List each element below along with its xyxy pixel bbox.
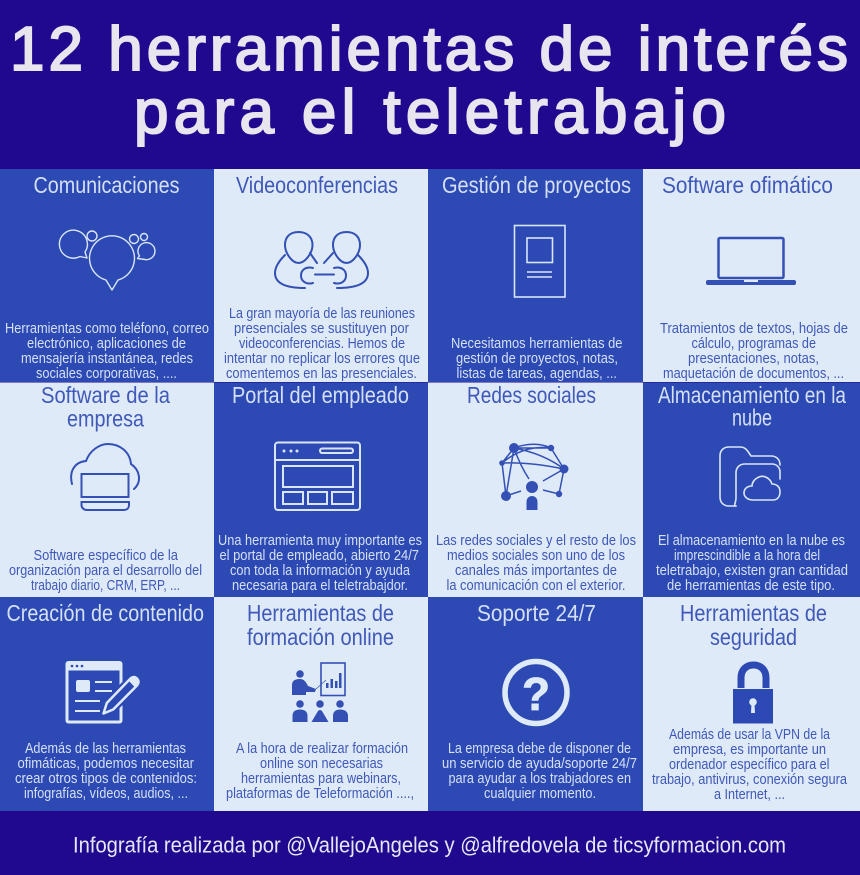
body text: Gestión de proyectos: Necesitamos herramientas de (451, 336, 622, 352)
body text: Herramientas de formación online: online son necesarias (260, 756, 383, 772)
panel: Videoconferencias (214, 169, 428, 382)
body text: Herramientas de formación online: A la hora de realizar formación (236, 741, 408, 757)
panel: Soporte 24/7 (428, 597, 643, 811)
body text: Almacenamiento en la nube (656, 533, 848, 594)
body text: Creación de contenido: ofimáticas, podemos necesitar (18, 756, 194, 772)
heading: Herramientas de seguridad (680, 600, 827, 650)
body text: Creación de contenido: crear otros tipos de contenidos: (15, 771, 197, 787)
body text: Portal del empleado: necesaria para el teletrabajdor. (232, 578, 408, 594)
panel: Creación de contenido (0, 597, 214, 811)
body text: Portal del empleado: con toda la información y ayuda (230, 563, 411, 579)
body text: Software ofimático: presentaciones, notas, (688, 351, 819, 367)
body text: Videoconferencias: presenciales se sustituyen por (234, 321, 409, 337)
body text: Herramientas de formación online (226, 741, 414, 802)
body text: Herramientas de seguridad: empresa, es importante un (673, 742, 826, 758)
body text: Software de la empresa: trabajo diario, CRM, ERP, ... (31, 578, 180, 594)
body text: Redes sociales: medios sociales son uno de los (447, 548, 625, 564)
heading: Herramientas de seguridad: Herramientas de (680, 600, 827, 626)
body text: Herramientas de seguridad: a Internet, ... (714, 787, 785, 803)
panel: Herramientas de seguridad (643, 597, 860, 811)
body text: Comunicaciones: Herramientas como teléfono, correo (5, 321, 209, 337)
title (10, 15, 848, 147)
body text: Videoconferencias: comentemos en las presenciales. (226, 366, 417, 382)
body text: Comunicaciones: mensajería instantánea, redes (21, 351, 193, 367)
body text: Herramientas de formación online: herramientas para webinars, (241, 771, 401, 787)
body text: Almacenamiento en la nube: de herramientas de este tipo. (667, 578, 835, 594)
body text: Gestión de proyectos (451, 336, 622, 382)
body text: Videoconferencias: videoconferencias. Hemos de (239, 336, 405, 352)
body text: Software de la empresa: Software específico de la (34, 548, 179, 564)
icon: cloud folder (720, 447, 780, 506)
body text: Software ofimático (660, 321, 848, 382)
heading: Software de la empresa: Software de la (41, 382, 170, 408)
body text: Herramientas de formación online: plataformas de Teleformación ...., (226, 786, 414, 802)
body text: Portal del empleado (218, 533, 422, 594)
icon: speech bubbles (59, 230, 155, 290)
footer credit: Infografía realizada por @VallejoAngeles y @alfredovela de ticsyformacion.com (73, 832, 786, 858)
body text: Soporte 24/7: para ayudar a los trabjadores en (448, 771, 631, 787)
heading: Creación de contenido: Creación de contenido (6, 600, 204, 626)
icon: two people connected (275, 232, 368, 288)
body text: Comunicaciones (5, 321, 209, 382)
body text: Software de la empresa: organización para el desarrollo del (9, 563, 202, 579)
body text: Videoconferencias: La gran mayoría de las reuniones (229, 306, 415, 322)
body text: Creación de contenido (15, 741, 197, 802)
title: 12 herramientas de interés (10, 15, 848, 84)
heading: Redes sociales: Redes sociales (467, 382, 596, 408)
body text: Software de la empresa (9, 548, 202, 594)
heading: Soporte 24/7: Soporte 24/7 (477, 600, 596, 626)
body text: Portal del empleado: el portal de empleado, abierto 24/7 (220, 548, 419, 564)
heading: Almacenamiento en la nube (658, 382, 846, 430)
body text: Redes sociales (436, 533, 636, 594)
body text: Creación de contenido: infografías, vídeos, audios, ... (24, 786, 188, 802)
heading: Gestión de proyectos: Gestión de proyectos (442, 172, 631, 198)
heading: Software de la empresa (41, 382, 170, 432)
icon: document (514, 226, 565, 297)
heading: Herramientas de formación online: Herramientas de (247, 600, 394, 626)
heading: Software de la empresa: empresa (67, 406, 144, 432)
icon: teacher and audience (292, 663, 348, 722)
panel: Gestión de proyectos (428, 169, 643, 382)
body text: Herramientas de seguridad: ordenador específico para el (669, 757, 830, 773)
body text: Software ofimático: cálculo, programas de (692, 336, 816, 352)
body text: Creación de contenido: Además de las herramientas (25, 741, 186, 757)
body text: Redes sociales: Las redes sociales y el resto de los (436, 533, 636, 549)
body text: Videoconferencias (224, 306, 420, 382)
body text: Redes sociales: la comunicación con el exterior. (446, 578, 626, 594)
body text: Portal del empleado: Una herramienta muy importante es (218, 533, 422, 549)
icon: content editor (66, 661, 138, 724)
body text: Gestión de proyectos: gestión de proyectos, notas, (456, 351, 618, 367)
heading: Herramientas de formación online: formación online (247, 624, 394, 650)
panel: Herramientas de formación online (214, 597, 428, 811)
icon: padlock (733, 665, 773, 724)
body text: Videoconferencias: intentar no replicar los errores que (224, 351, 420, 367)
body text: Soporte 24/7 (442, 741, 637, 802)
icon: cloud with laptop (71, 444, 139, 510)
title: para el teletrabajo (134, 78, 726, 147)
heading: Almacenamiento en la nube: nube (732, 404, 772, 430)
heading: Herramientas de seguridad: seguridad (710, 624, 797, 650)
body text: Redes sociales: canales más importantes de (455, 563, 617, 579)
panel: Redes sociales (428, 382, 643, 597)
icon: laptop (706, 238, 796, 285)
body text: Gestión de proyectos: listas de tareas, agendas, ... (456, 366, 617, 382)
icon: web portal window (275, 442, 360, 510)
panel: Comunicaciones (0, 169, 214, 382)
body text: Herramientas de seguridad: Además de usar la VPN de la (669, 727, 831, 743)
icon: social network (499, 443, 568, 510)
body text: Soporte 24/7: un servicio de ayuda/soporte 24/7 (442, 756, 637, 772)
body text: Soporte 24/7: cualquier momento. (484, 786, 596, 802)
heading: Herramientas de formación online (247, 600, 394, 650)
icon: question mark (505, 662, 567, 724)
heading: Portal del empleado: Portal del empleado (232, 382, 409, 408)
icon: question mark: ? (522, 668, 550, 720)
heading: Comunicaciones: Comunicaciones (34, 172, 180, 198)
body text: Almacenamiento en la nube: imprescindible a la hora del (674, 548, 820, 564)
body text: Soporte 24/7: La empresa debe de disponer de (448, 741, 631, 757)
body text: Comunicaciones: sociales corporativas, .... (36, 366, 177, 382)
heading: Videoconferencias: Videoconferencias (236, 172, 398, 198)
panel: Almacenamiento en la nube (643, 382, 860, 597)
body text: Comunicaciones: electrónico, aplicaciones de (27, 336, 186, 352)
heading: Software ofimático: Software ofimático (662, 172, 833, 198)
panel: Software de la empresa (0, 382, 214, 597)
panel: Portal del empleado (214, 382, 428, 597)
body text: Herramientas de seguridad (652, 727, 848, 803)
panel: Software ofimático (643, 169, 860, 382)
